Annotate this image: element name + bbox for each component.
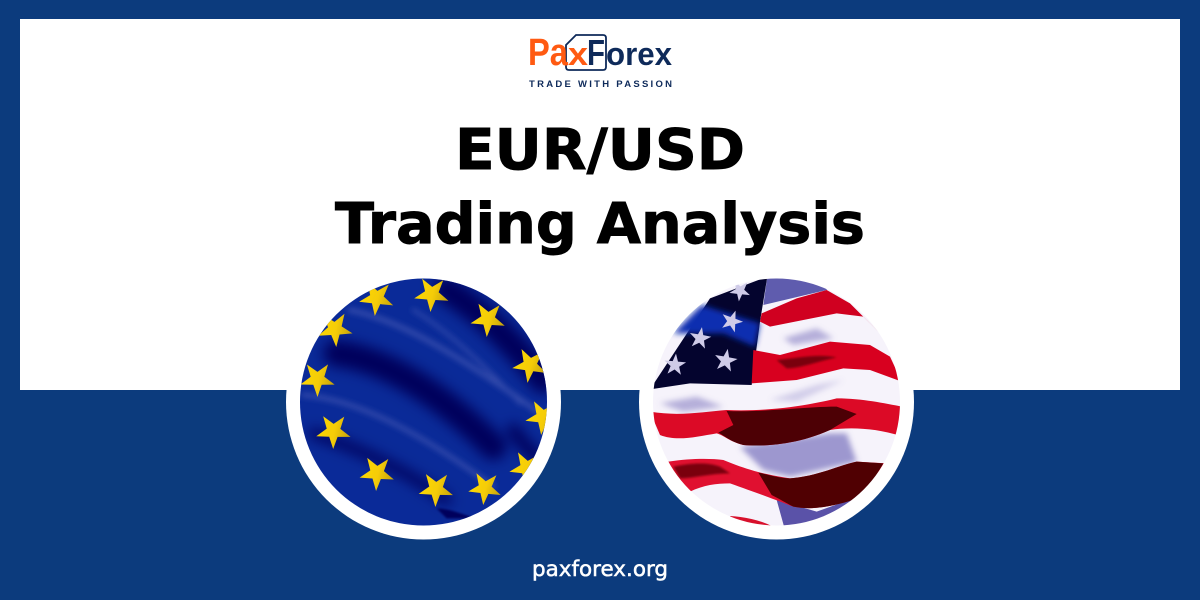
logo wordmark F: F xyxy=(587,32,605,73)
top lavender field xyxy=(763,277,827,305)
dark folds xyxy=(313,290,550,500)
bottom lavender field xyxy=(777,495,863,530)
lavender shadows xyxy=(660,328,857,477)
title line 1: EUR/USD xyxy=(455,118,745,183)
light folds xyxy=(303,310,540,487)
logo wordmark Pa: Pa xyxy=(528,32,569,74)
logo frame xyxy=(566,35,606,70)
title line 2: Trading Analysis xyxy=(335,192,865,257)
stripes xyxy=(760,290,878,331)
white ring xyxy=(286,264,561,540)
logo wordmark orex: orex xyxy=(606,36,672,72)
EU stars xyxy=(301,278,547,507)
logo tagline: TRADE WITH PASSION xyxy=(529,79,672,90)
white ring xyxy=(639,264,914,540)
US stars xyxy=(664,282,750,375)
bottom crease xyxy=(437,508,477,518)
logo wordmark x: x xyxy=(568,36,588,72)
PaxForex logo xyxy=(528,32,672,90)
US flag circle xyxy=(639,264,914,540)
website url: paxforex.org xyxy=(532,557,668,581)
white header panel xyxy=(20,19,1180,390)
EU flag circle xyxy=(286,264,565,540)
canton xyxy=(650,277,767,389)
